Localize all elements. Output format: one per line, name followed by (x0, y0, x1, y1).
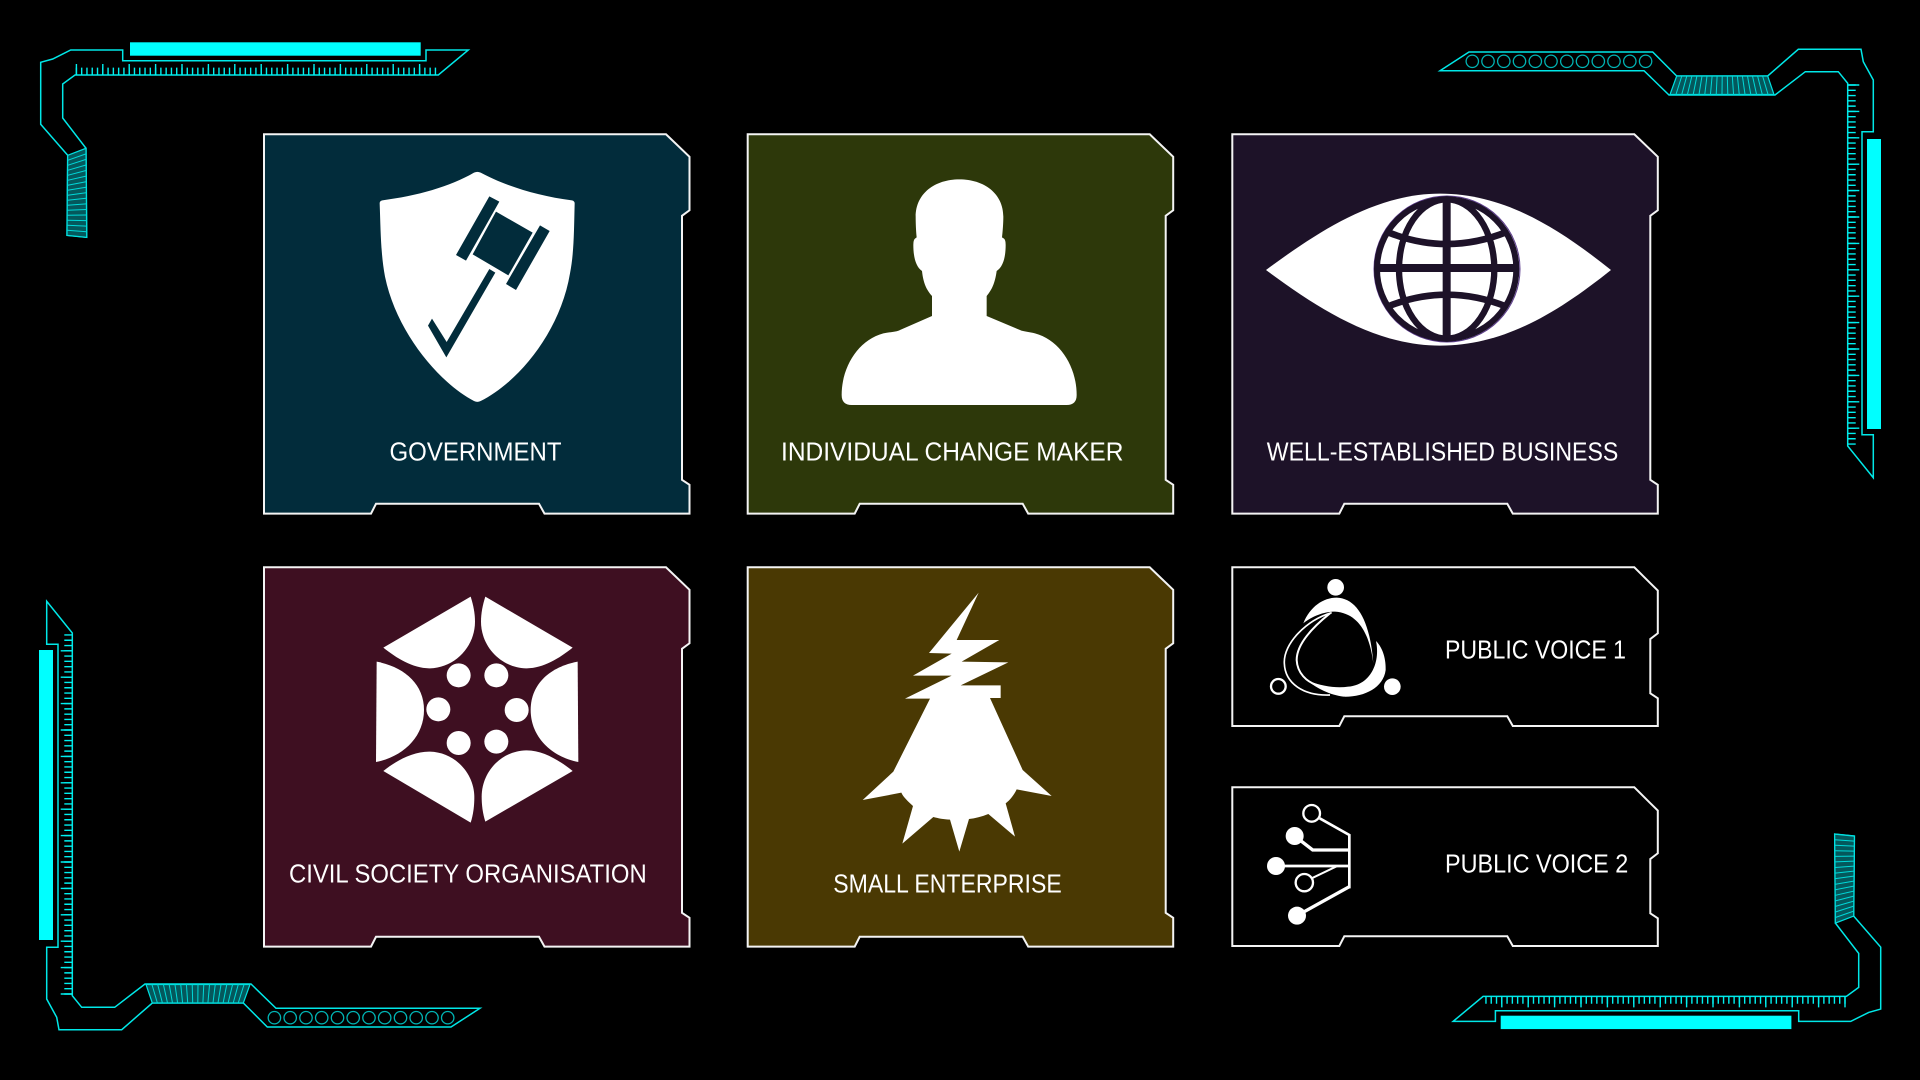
panel frame: public voice 1 (1232, 567, 1658, 726)
panel frame: government (264, 134, 690, 514)
icon: person silhouette (842, 179, 1077, 405)
label: well-established business: WELL-ESTABLISHED BUSINESS (1267, 439, 1618, 467)
panel frame: well-established business (1232, 134, 1658, 514)
icon: spiked bulb with lightning (863, 593, 1052, 852)
icon: eye with globe (1266, 194, 1611, 346)
label: civil society organisation: CIVIL SOCIETY ORGANISATION (289, 860, 647, 888)
icon: shield with gavel and check (380, 172, 575, 402)
label: public voice 2: PUBLIC VOICE 2 (1445, 850, 1628, 878)
panel frame: civil society organisation (264, 567, 690, 947)
panel: small enterprise (748, 567, 1173, 947)
HUD corner: top left (41, 42, 468, 237)
panel: public voice 1 (1232, 567, 1658, 726)
HUD corner: top right (1440, 49, 1881, 478)
panel: well-established business (1232, 134, 1658, 514)
panel: government (264, 134, 690, 514)
label: public voice 1: PUBLIC VOICE 1 (1445, 637, 1626, 665)
icon: hexagon of petals and dots (376, 597, 578, 823)
label: government: GOVERNMENT (390, 439, 562, 467)
label: small enterprise: SMALL ENTERPRISE (833, 870, 1062, 898)
HUD corner: bottom right (1453, 834, 1881, 1029)
icon: three-dot orbit (1271, 579, 1401, 697)
panel frame: individual change maker (748, 134, 1173, 514)
panel frame: small enterprise (748, 567, 1173, 947)
panel frame: public voice 2 (1232, 787, 1658, 946)
label: individual change maker: INDIVIDUAL CHANGE MAKER (781, 439, 1124, 467)
panel: public voice 2 (1232, 787, 1658, 946)
panel: civil society organisation (264, 567, 690, 947)
panel: individual change maker (748, 134, 1173, 514)
icon: circuit nodes (1267, 805, 1349, 925)
HUD corner: bottom left (39, 601, 480, 1030)
